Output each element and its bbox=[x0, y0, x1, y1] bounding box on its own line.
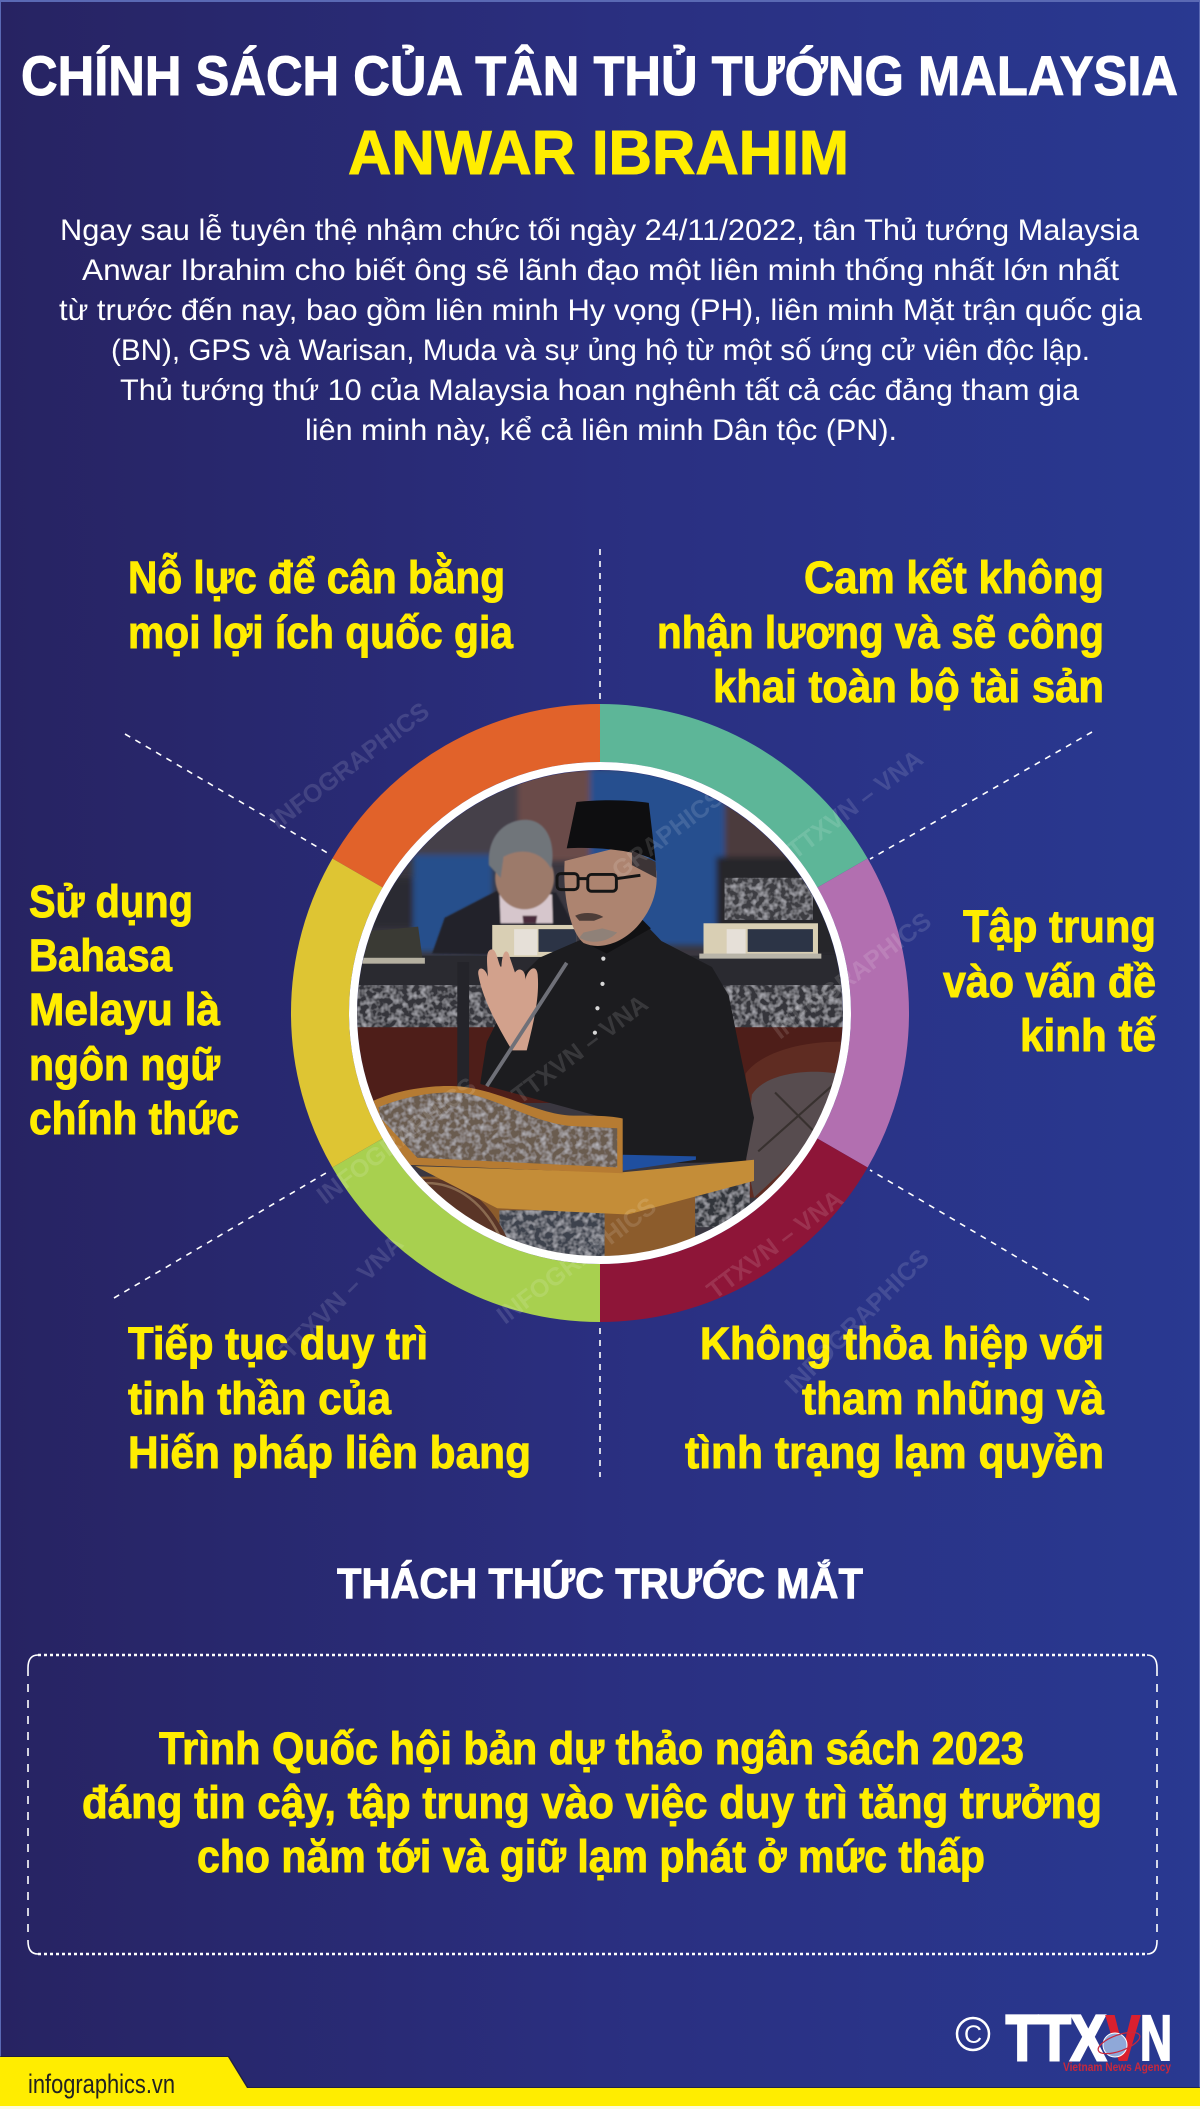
logo: TTXVN bbox=[957, 2002, 1172, 2074]
policy: Bahasa Melayu: Melayu là bbox=[29, 984, 221, 1035]
logo: TTXVN: TTX bbox=[1006, 2002, 1106, 2074]
ring segment: lime bbox=[358, 1153, 600, 1293]
callout text: cho năm tới và giữ lạm phát ở mức thấp bbox=[197, 1831, 985, 1882]
intro paragraph: liên minh này, kể cả liên minh Dân tộc (PN). bbox=[305, 414, 897, 447]
lower lectern area bbox=[691, 1181, 750, 1227]
policy: no compromise on corruption: Không thỏa hiệp với bbox=[700, 1318, 1104, 1369]
ring segment: purple bbox=[842, 873, 880, 1153]
policy: Bahasa Melayu: Bahasa bbox=[29, 930, 173, 981]
desk bbox=[354, 956, 847, 985]
watermarks: INFOGRAPHICS bbox=[767, 907, 937, 1045]
intro paragraph: Anwar Ibrahim cho biết ông sẽ lãnh đạo một liên minh thống nhất lớn nhất bbox=[82, 254, 1119, 287]
watermarks: INFOGRAPHICS bbox=[312, 1072, 482, 1210]
policy: no compromise on corruption: tham nhũng và bbox=[802, 1373, 1105, 1424]
background man bbox=[432, 820, 575, 956]
ring segment: crimson bbox=[600, 1153, 842, 1293]
policy: no salary, declare assets: Cam kết không bbox=[804, 552, 1104, 603]
lectern bbox=[415, 1160, 754, 1215]
ring segment: yellow bbox=[320, 873, 358, 1153]
microphone bbox=[487, 963, 567, 1086]
watermarks: INFOGRAPHICS bbox=[779, 1244, 935, 1399]
callout text: Trình Quốc hội bản dự thảo ngân sách 2023 bbox=[159, 1723, 1024, 1774]
policy: no salary, declare assets: nhận lương và sẽ công bbox=[657, 607, 1104, 658]
speaker robe bbox=[480, 919, 754, 1164]
intro paragraph: Thủ tướng thứ 10 của Malaysia hoan nghênh tất cả các đảng tham gia bbox=[120, 374, 1080, 407]
policy: federal constitution: Tiếp tục duy trì bbox=[128, 1318, 428, 1369]
policy: balance national interests bbox=[128, 552, 514, 658]
copyright symbol bbox=[957, 2018, 989, 2050]
callout text: đáng tin cậy, tập trung vào việc duy trì tăng trưởng bbox=[82, 1777, 1102, 1828]
watermarks: TTXVN – VNA bbox=[507, 990, 653, 1110]
title bbox=[21, 44, 1178, 188]
watermarks bbox=[265, 697, 937, 1399]
copyright symbol: C bbox=[964, 2021, 982, 2049]
watermarks: GRAPHICS bbox=[607, 783, 729, 885]
logo: TTXVN: V bbox=[1106, 2002, 1140, 2074]
footer yellow band bbox=[0, 2056, 1200, 2109]
policy: focus on economy: vào vấn đề bbox=[943, 956, 1156, 1007]
intro paragraph: Ngay sau lễ tuyên thệ nhậm chức tối ngày 24/11/2022, tân Thủ tướng Malaysia bbox=[60, 214, 1140, 247]
policy: balance national interests: Nỗ lực để cân bằng bbox=[128, 552, 505, 603]
intro paragraph bbox=[59, 214, 1143, 447]
policy: focus on economy: Tập trung bbox=[963, 901, 1156, 952]
policy: federal constitution: tinh thần của bbox=[128, 1373, 392, 1424]
policy: federal constitution: Hiến pháp liên bang bbox=[128, 1427, 531, 1478]
portrait photo bbox=[354, 768, 847, 1261]
policy: Bahasa Melayu bbox=[29, 876, 239, 1144]
website url: infographics.vn bbox=[28, 2069, 175, 2099]
color ring bbox=[320, 733, 880, 1293]
logo: TTXVN: N bbox=[1140, 2002, 1172, 2074]
watermarks: TTXVN – VNA bbox=[782, 745, 928, 865]
intro paragraph: từ trước đến nay, bao gồm liên minh Hy vọng (PH), liên minh Mặt trận quốc gia bbox=[59, 294, 1143, 327]
title: ANWAR IBRAHIM bbox=[348, 119, 849, 188]
watermarks: INFOGRAPHICS bbox=[265, 697, 435, 835]
raised hand bbox=[478, 949, 538, 1050]
dashed callout box bbox=[28, 1655, 1157, 1954]
policy: no compromise on corruption: tình trạng lạm quyền bbox=[685, 1427, 1104, 1478]
white ring around photo bbox=[353, 766, 847, 1260]
policy: no salary, declare assets: khai toàn bộ tài sản bbox=[713, 661, 1104, 712]
policy: Bahasa Melayu: chính thức bbox=[29, 1093, 239, 1144]
policy: focus on economy bbox=[943, 901, 1157, 1061]
intro paragraph: (BN), GPS và Warisan, Muda và sự ủng hộ từ một số ứng cử viên độc lập. bbox=[111, 334, 1090, 367]
watermarks: TTXVN – VNA bbox=[274, 1230, 409, 1364]
policy: focus on economy: kinh tế bbox=[1020, 1010, 1157, 1061]
policy: no salary, declare assets bbox=[657, 552, 1104, 712]
callout text bbox=[82, 1723, 1102, 1882]
section heading: challenges: THÁCH THỨC TRƯỚC MẮT bbox=[337, 1559, 863, 1608]
policy: balance national interests: mọi lợi ích quốc gia bbox=[128, 607, 514, 658]
logo: TTXVN: Vietnam News Agency bbox=[1063, 2062, 1172, 2074]
chair bbox=[746, 1042, 847, 1198]
policy: Bahasa Melayu: ngôn ngữ bbox=[29, 1039, 220, 1090]
watermarks: TTXVN – VNA bbox=[702, 1185, 848, 1305]
speaker head bbox=[564, 846, 657, 946]
watermarks: INFOGRAPHICS bbox=[492, 1192, 662, 1330]
policy: Bahasa Melayu: Sử dụng bbox=[29, 876, 193, 927]
policy: federal constitution bbox=[128, 1318, 531, 1478]
policy: no compromise on corruption bbox=[685, 1318, 1105, 1478]
ring segment: green bbox=[600, 733, 842, 873]
ring segment: orange bbox=[358, 733, 600, 873]
